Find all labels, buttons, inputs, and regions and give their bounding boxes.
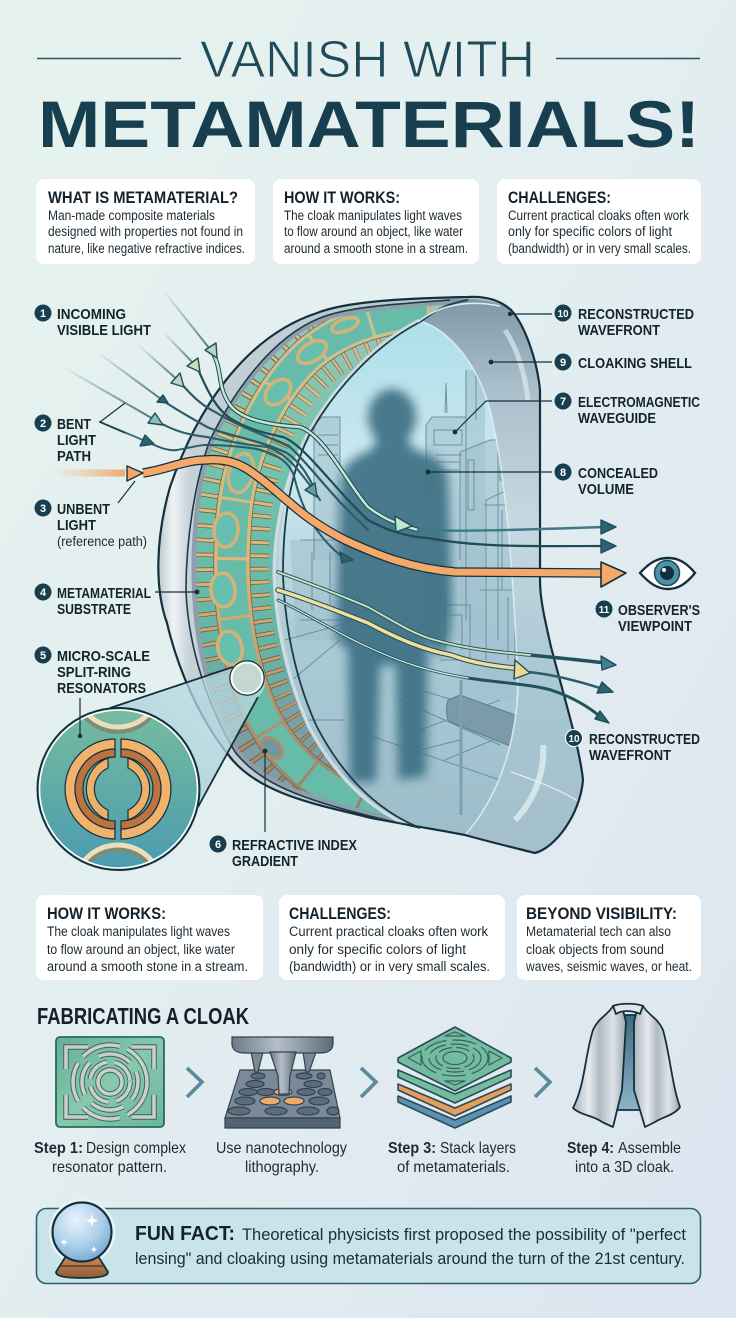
label 9: cloaking shell: CLOAKING SHELL [578, 355, 692, 372]
lower rays [278, 572, 605, 718]
panel: how it works (bottom): The cloak manipulates light waves [47, 924, 230, 939]
panel: challenges (top): CHALLENGES: [508, 188, 611, 207]
label 9: cloaking shell: 9 [560, 357, 566, 369]
label 5: split-ring resonators: 5 [40, 650, 46, 662]
step 3 caption: of metamaterials. [397, 1159, 510, 1176]
label 11: observer's viewpoint: VIEWPOINT [618, 618, 692, 635]
icon: step 3 stacked layers [398, 1027, 511, 1128]
icon: step 1 resonator pattern [56, 1037, 164, 1127]
panel: beyond visibility: waves, seismic waves, or heat. [525, 959, 692, 974]
label 1: incoming visible light [34, 304, 151, 339]
label 5: split-ring resonators: SPLIT-RING [57, 664, 131, 681]
label 10: reconstructed wavefront (bottom): RECONSTRUCTED [589, 731, 700, 748]
panel: what is metamaterial: Man-made composite materials [48, 208, 215, 223]
label 8: concealed volume: 8 [560, 467, 566, 479]
label 8: concealed volume [426, 464, 658, 498]
panel: what is metamaterial: nature, like negative refractive indices. [48, 241, 245, 256]
label 2: bent light path: LIGHT [57, 432, 96, 449]
label 11: observer's viewpoint: OBSERVER'S [618, 602, 700, 619]
callout: fun fact: FUN FACT: [135, 1223, 235, 1245]
label 10: reconstructed wavefront (top) [508, 304, 694, 339]
label 1: incoming visible light: 1 [40, 308, 46, 320]
label 8: concealed volume: CONCEALED [578, 465, 658, 482]
panel: beyond visibility: BEYOND VISIBILITY: [526, 904, 677, 923]
label 7: electromagnetic waveguide: 7 [560, 396, 566, 408]
label 4: metamaterial substrate: 4 [40, 587, 47, 599]
arrow: step 1 to 2 [187, 1068, 202, 1097]
label 10: reconstructed wavefront (top): 10 [557, 309, 569, 320]
step 3 caption [388, 1140, 516, 1176]
icon: step 4 cloak [573, 1004, 680, 1127]
panel: what is metamaterial: WHAT IS METAMATERIAL? [48, 188, 238, 207]
metamaterial substrate band [192, 300, 450, 828]
label 8: concealed volume: VOLUME [578, 481, 634, 498]
step 2 caption: lithography. [245, 1159, 319, 1176]
panel: how it works (top) [273, 179, 479, 264]
panel: challenges (bottom): CHALLENGES: [289, 904, 391, 923]
panel: how it works (top): HOW IT WORKS: [284, 188, 400, 207]
label 10: reconstructed wavefront (top): WAVEFRONT [578, 322, 660, 339]
cloaking shell body [158, 297, 583, 853]
arrow: step 3 to 4 [535, 1068, 550, 1097]
label 5: split-ring resonators [34, 646, 150, 738]
step 2 caption: Use nanotechnology [216, 1140, 347, 1157]
arrowheads [127, 343, 626, 723]
panel: challenges (top): Current practical cloaks often work [508, 208, 689, 223]
panel: what is metamaterial: designed with properties not found in [48, 224, 243, 239]
orange unbent ray [57, 460, 602, 573]
title: METAMATERIALS! [38, 87, 700, 161]
panel: how it works (top): The cloak manipulates light waves [284, 208, 462, 223]
cloaking device illustration [158, 297, 583, 853]
label 5: split-ring resonators: MICRO-SCALE [57, 648, 150, 665]
label 7: electromagnetic waveguide: ELECTROMAGNETIC [578, 394, 700, 411]
step 3 caption: Stack layers [440, 1140, 516, 1157]
label 10: reconstructed wavefront (top): RECONSTRUCTED [578, 306, 694, 323]
panel: how it works (top): around a smooth stone in a stream. [284, 241, 468, 256]
step 1 caption: resonator pattern. [52, 1159, 167, 1176]
title [38, 31, 700, 161]
step 4 caption: Assemble [618, 1140, 681, 1157]
step 1 caption: Design complex [86, 1140, 186, 1157]
glass shell [400, 299, 583, 853]
label 6: refractive index gradient: GRADIENT [232, 853, 298, 870]
step 2 caption [216, 1140, 347, 1176]
panel: how it works (bottom): around a smooth stone in a stream. [47, 959, 248, 974]
step 4 caption: into a 3D cloak. [575, 1159, 674, 1176]
arrow: step 2 to 3 [361, 1068, 376, 1097]
panel: beyond visibility: cloak objects from sound [526, 942, 664, 957]
label 7: electromagnetic waveguide: WAVEGUIDE [578, 410, 656, 427]
callout: fun fact: Theoretical physicists first proposed the possibility of "perfect [242, 1225, 686, 1244]
panel: what is metamaterial [36, 179, 255, 264]
outlines of the shell [158, 297, 583, 853]
step 3 caption: Step 3: [388, 1140, 436, 1157]
label 3: unbent light: UNBENT [57, 501, 110, 518]
incoming and bent rays [63, 290, 605, 555]
panel: how it works (bottom): HOW IT WORKS: [47, 904, 166, 923]
panel: challenges (bottom): Current practical cloaks often work [289, 924, 488, 939]
icon: step 2 lithography machine [225, 1037, 340, 1128]
light rays [57, 290, 626, 723]
label 2: bent light path [34, 403, 125, 465]
label 4: metamaterial substrate [34, 584, 200, 618]
callout: fun fact: lensing" and cloaking using metamaterials around the turn of the 21st century. [135, 1249, 685, 1268]
panel: challenges (top): (bandwidth) or in very small scales. [508, 241, 691, 256]
icon: crystal ball [49, 1199, 115, 1278]
label 9: cloaking shell [489, 354, 692, 372]
concealed person silhouette [336, 389, 452, 782]
panel: beyond visibility [517, 895, 701, 980]
label 6: refractive index gradient [210, 749, 357, 870]
label 11: observer's viewpoint: 11 [599, 605, 610, 616]
panel: challenges (bottom): only for specific colors of light [289, 942, 466, 957]
step 4 caption: Step 4: [567, 1140, 614, 1157]
callout: fun fact [36, 1199, 700, 1284]
heading: fabricating a cloak: FABRICATING A CLOAK [37, 1003, 249, 1029]
panel: challenges (top): only for specific colors of light [508, 224, 672, 239]
title: VANISH WITH [200, 31, 535, 89]
step 1 caption: Step 1: [34, 1140, 83, 1157]
label 2: bent light path: 2 [40, 418, 46, 430]
inset: micro-scale split-ring resonator zoom [36, 660, 265, 871]
icon: observer eye [640, 558, 695, 589]
label 11: observer's viewpoint [596, 600, 700, 635]
panel: challenges (top) [497, 179, 701, 264]
label 2: bent light path: PATH [57, 448, 91, 465]
label 3: unbent light [34, 481, 147, 549]
label 6: refractive index gradient: REFRACTIVE INDEX [232, 837, 357, 854]
label 10: reconstructed wavefront (bottom) [566, 730, 700, 764]
step 1 caption [34, 1140, 186, 1176]
label 1: incoming visible light: INCOMING [57, 306, 126, 323]
label 4: metamaterial substrate: SUBSTRATE [57, 601, 131, 618]
label 10: reconstructed wavefront (bottom): WAVEFRONT [589, 747, 671, 764]
label 3: unbent light: (reference path) [57, 534, 147, 549]
label 4: metamaterial substrate: METAMATERIAL [57, 585, 151, 602]
panel: how it works (bottom) [36, 895, 263, 980]
step 4 caption [567, 1140, 681, 1176]
panel: challenges (bottom): (bandwidth) or in very small scales. [289, 959, 490, 974]
label 3: unbent light: 3 [40, 503, 46, 515]
panel: beyond visibility: Metamaterial tech can also [526, 924, 671, 939]
panel: how it works (top): to flow around an object, like water [284, 224, 463, 239]
label 2: bent light path: BENT [57, 416, 91, 433]
label 1: incoming visible light: VISIBLE LIGHT [57, 322, 151, 339]
label 5: split-ring resonators: RESONATORS [57, 680, 146, 697]
label 10: reconstructed wavefront (bottom): 10 [568, 734, 580, 745]
split rings [65, 739, 171, 839]
interior window with city [270, 321, 520, 835]
label 3: unbent light: LIGHT [57, 517, 96, 534]
label 6: refractive index gradient: 6 [215, 839, 221, 851]
panel: challenges (bottom) [279, 895, 505, 980]
panel: how it works (bottom): to flow around an object, like water [47, 942, 235, 957]
label 7: electromagnetic waveguide [453, 392, 700, 434]
